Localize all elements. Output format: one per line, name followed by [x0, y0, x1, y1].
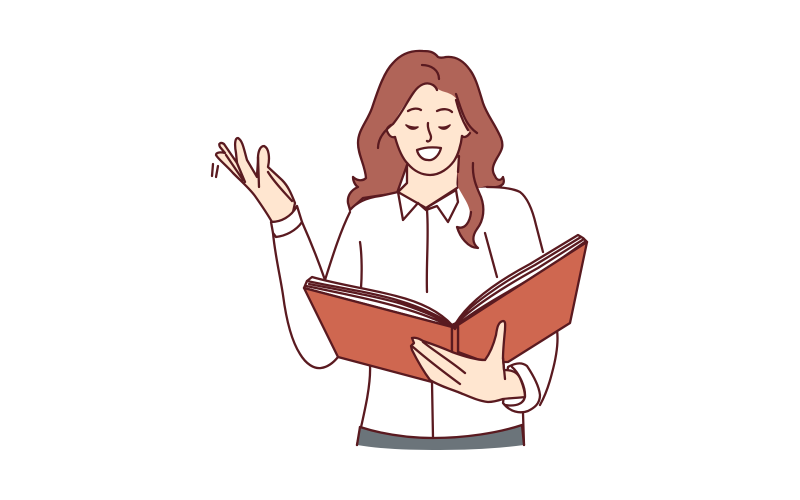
- holding hand: [411, 321, 525, 402]
- trousers: [357, 425, 524, 450]
- finger and palm creases: [226, 155, 292, 201]
- spine: [452, 327, 458, 356]
- left ear: [387, 125, 395, 137]
- hair parting: [422, 65, 439, 79]
- neck: [398, 158, 458, 209]
- right cover: [458, 242, 587, 362]
- open book: [304, 235, 587, 382]
- jaw: [395, 136, 462, 175]
- raised hand: [216, 138, 295, 222]
- right ear: [462, 133, 470, 137]
- left eye: [406, 125, 418, 129]
- collar: [398, 190, 458, 222]
- right sleeve: [540, 330, 558, 405]
- cuff: [271, 206, 302, 237]
- hair lock over shirt: [457, 155, 483, 248]
- finger creases: [413, 342, 505, 384]
- motion lines: [212, 164, 218, 177]
- hairline: [378, 83, 437, 148]
- pages: [304, 235, 587, 327]
- right cuff: [503, 363, 540, 412]
- left sleeve: [302, 222, 325, 280]
- shirt: [273, 187, 558, 445]
- nose: [427, 123, 431, 141]
- body left side: [325, 212, 350, 280]
- fold lines: [357, 233, 524, 445]
- shoulders: [350, 192, 398, 210]
- eyebrows: [408, 109, 452, 112]
- face: [378, 65, 477, 175]
- hair: [348, 51, 504, 210]
- mouth: [417, 147, 441, 160]
- left cover: [304, 288, 452, 382]
- placket: [427, 210, 433, 438]
- right eye: [439, 125, 450, 129]
